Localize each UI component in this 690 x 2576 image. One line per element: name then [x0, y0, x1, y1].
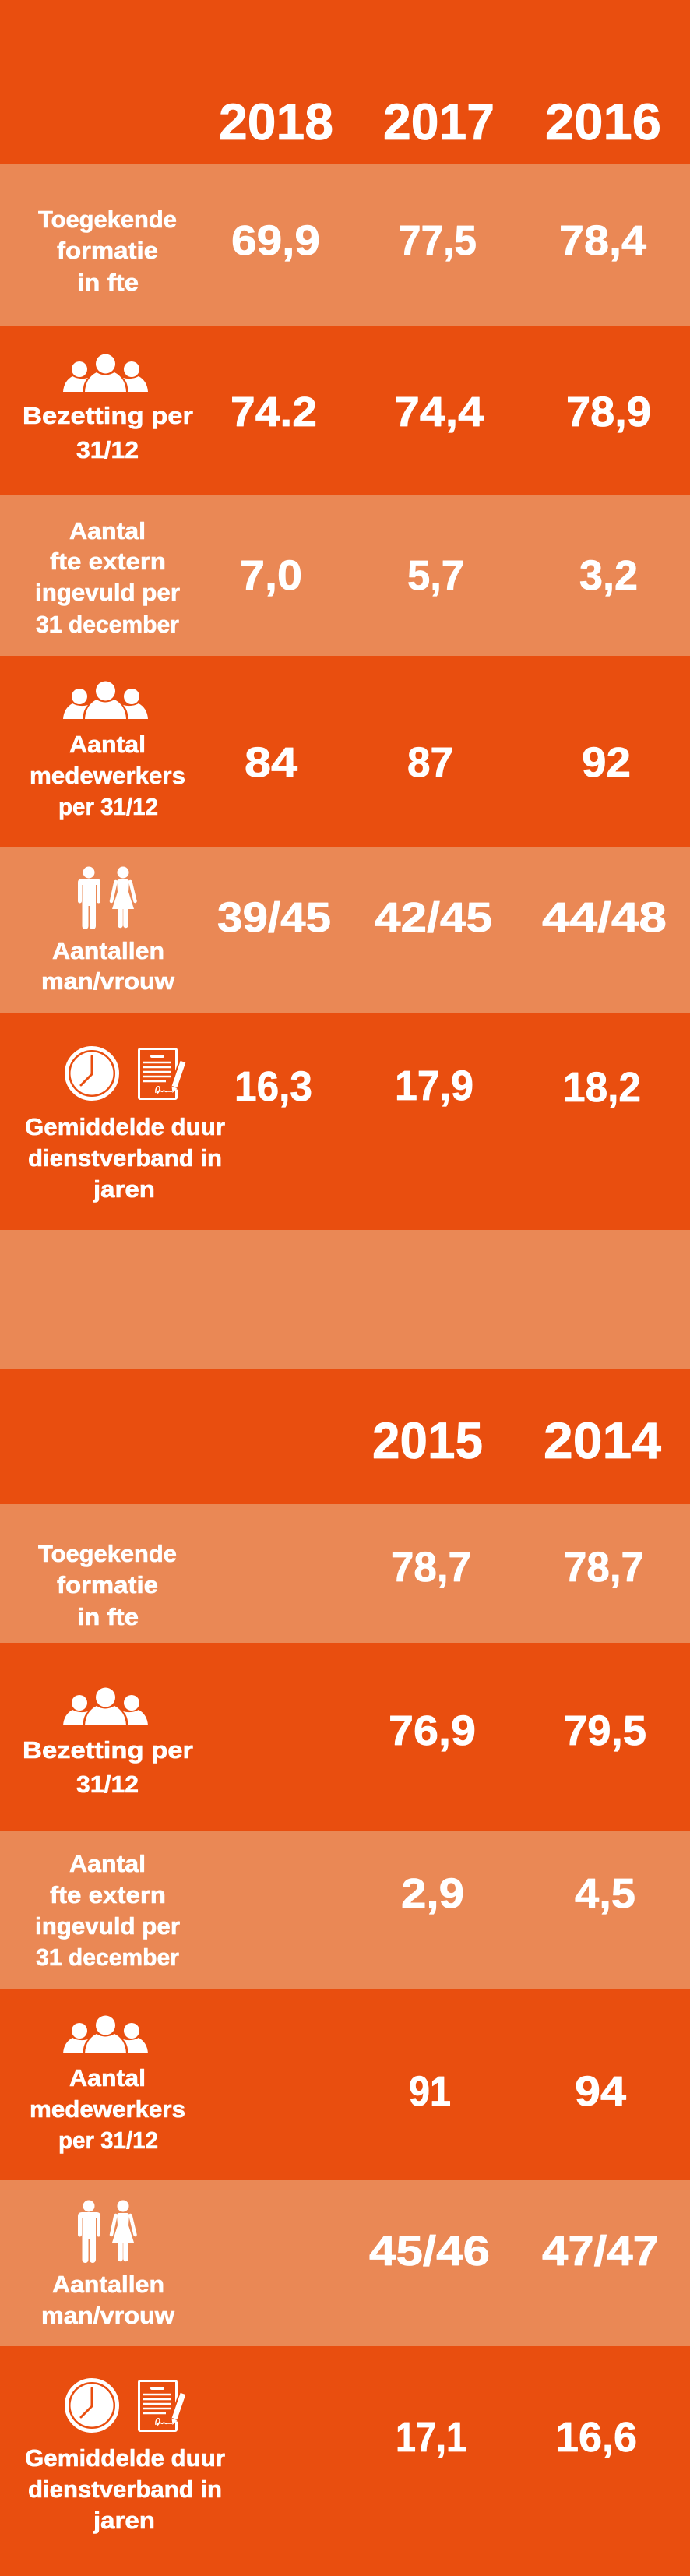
year 2017: 2017 [383, 93, 495, 150]
value 42/45: 42/45 [375, 894, 492, 941]
label: toegekende formatie in fte: formatie [57, 237, 158, 264]
value 94: 94 [575, 2068, 626, 2115]
label: aantal fte extern ingevuld per 31 december: Aantal [69, 1850, 146, 1877]
label: gemiddelde duur dienstverband in jaren [25, 2444, 225, 2534]
icon: clock and contract [67, 2380, 183, 2430]
label: toegekende formatie in fte: in fte [77, 1603, 139, 1630]
value 69,9: 69,9 [231, 217, 320, 264]
panel: aantallen man/vrouw 2015-2014 [0, 2180, 690, 2346]
value 76,9: 76,9 [389, 1707, 476, 1754]
panel: aantallen man/vrouw 2018-2016 [0, 847, 690, 1013]
value 47/47: 47/47 [542, 2228, 659, 2275]
value 16,3: 16,3 [234, 1063, 312, 1110]
label: bezetting per 31/12: Bezetting per [23, 1736, 193, 1764]
value 84: 84 [245, 739, 297, 786]
label: aantal fte extern ingevuld per 31 december: ingevuld per [35, 579, 180, 606]
value 74.2: 74.2 [231, 389, 317, 435]
icon: people [63, 2016, 148, 2053]
label: aantal fte extern ingevuld per 31 december [35, 1850, 180, 1971]
label: aantal fte extern ingevuld per 31 december: ingevuld per [35, 1912, 180, 1940]
label: toegekende formatie in fte [38, 1540, 177, 1630]
icon: people [63, 354, 148, 392]
icon: clock and contract [67, 1048, 183, 1098]
panel: fte extern 2018-2016 [0, 495, 690, 656]
value 18,2: 18,2 [563, 1064, 641, 1111]
label: toegekende formatie in fte: in fte [77, 269, 139, 296]
label: aantal fte extern ingevuld per 31 december: 31 december [36, 1943, 179, 1971]
panel: toegekende formatie 2015-2014 [0, 1504, 690, 1643]
value 74,4: 74,4 [394, 389, 484, 435]
value 45/46: 45/46 [369, 2228, 490, 2275]
value 78,9: 78,9 [566, 389, 651, 435]
value 39/45: 39/45 [217, 894, 331, 941]
value 87: 87 [407, 739, 453, 786]
icon: people [63, 1687, 148, 1725]
label: aantal medewerkers per 31/12: medewerkers [30, 2095, 185, 2123]
label: aantallen man/vrouw [41, 937, 175, 995]
label: aantallen man/vrouw [41, 2271, 175, 2329]
label: gemiddelde duur dienstverband in jaren: Gemiddelde duur [25, 1113, 225, 1140]
panel: bezetting 2015-2014 [0, 1643, 690, 1831]
icon: man and woman [78, 2200, 136, 2263]
label: gemiddelde duur dienstverband in jaren: jaren [93, 1175, 155, 1203]
spacer band [0, 1230, 690, 1369]
panel: toegekende formatie 2018-2016 [0, 164, 690, 326]
year 2016: 2016 [545, 93, 661, 150]
label: aantal medewerkers per 31/12: medewerkers [30, 762, 185, 789]
panel: gemiddelde duur dienstverband 2015-2014 [0, 2346, 690, 2576]
value 77,5: 77,5 [399, 217, 477, 264]
label: aantal fte extern ingevuld per 31 december: 31 december [36, 611, 179, 638]
value 78,7: 78,7 [564, 1544, 644, 1591]
label: aantal medewerkers per 31/12: Aantal [69, 731, 146, 758]
panel: gemiddelde duur dienstverband 2018-2016 [0, 1013, 690, 1230]
year 2015: 2015 [372, 1411, 483, 1469]
value 17,9: 17,9 [395, 1062, 473, 1109]
label: bezetting per 31/12 [23, 402, 193, 463]
label: toegekende formatie in fte: Toegekende [38, 1540, 177, 1567]
label: aantal medewerkers per 31/12 [30, 2064, 185, 2154]
year 2018: 2018 [219, 93, 333, 150]
value 5,7: 5,7 [407, 552, 464, 599]
panel: aantal medewerkers 2018-2016 [0, 656, 690, 847]
label: aantallen man/vrouw: man/vrouw [41, 967, 175, 995]
label: aantal fte extern ingevuld per 31 december: fte extern [50, 1881, 166, 1908]
label: gemiddelde duur dienstverband in jaren: dienstverband in [28, 2476, 222, 2503]
label: aantal fte extern ingevuld per 31 december: Aantal [69, 517, 146, 544]
value 78,7: 78,7 [391, 1544, 471, 1591]
label: aantal fte extern ingevuld per 31 december [35, 517, 180, 638]
year 2014: 2014 [544, 1411, 661, 1469]
label: bezetting per 31/12: 31/12 [76, 436, 139, 463]
icon: people [63, 681, 148, 719]
value 4,5: 4,5 [575, 1870, 635, 1917]
label: toegekende formatie in fte [38, 206, 177, 296]
panel: bezetting 2018-2016 [0, 326, 690, 495]
label: toegekende formatie in fte: Toegekende [38, 206, 177, 233]
label: aantal medewerkers per 31/12: Aantal [69, 2064, 146, 2091]
label: aantallen man/vrouw: man/vrouw [41, 2302, 175, 2329]
value 78,4: 78,4 [559, 217, 646, 264]
value 2,9: 2,9 [401, 1870, 464, 1917]
label: bezetting per 31/12: Bezetting per [23, 402, 193, 429]
label: aantallen man/vrouw: Aantallen [52, 937, 164, 964]
value 92: 92 [582, 739, 631, 786]
value 44/48: 44/48 [542, 894, 667, 941]
panel: aantal medewerkers 2015-2014 [0, 1989, 690, 2180]
label: bezetting per 31/12: 31/12 [76, 1771, 139, 1798]
label: gemiddelde duur dienstverband in jaren [25, 1113, 225, 1203]
label: gemiddelde duur dienstverband in jaren: jaren [93, 2507, 155, 2534]
label: aantal fte extern ingevuld per 31 december: fte extern [50, 548, 166, 575]
panel: header 2015-2014 [0, 1369, 690, 1504]
value 16,6: 16,6 [555, 2414, 637, 2461]
label: aantal medewerkers per 31/12 [30, 731, 185, 820]
panel: fte extern 2015-2014 [0, 1831, 690, 1989]
icon: man and woman [78, 866, 136, 929]
value 3,2: 3,2 [579, 552, 638, 599]
value 91: 91 [409, 2068, 451, 2115]
label: gemiddelde duur dienstverband in jaren: Gemiddelde duur [25, 2444, 225, 2472]
label: aantal medewerkers per 31/12: per 31/12 [58, 793, 158, 820]
panel: header 2018-2016 [0, 0, 690, 164]
label: aantal medewerkers per 31/12: per 31/12 [58, 2127, 158, 2154]
label: gemiddelde duur dienstverband in jaren: dienstverband in [28, 1144, 222, 1172]
label: toegekende formatie in fte: formatie [57, 1571, 158, 1598]
value 79,5: 79,5 [564, 1707, 646, 1754]
label: aantallen man/vrouw: Aantallen [52, 2271, 164, 2298]
value 7,0: 7,0 [240, 552, 302, 599]
value 17,1: 17,1 [396, 2414, 466, 2461]
label: bezetting per 31/12 [23, 1736, 193, 1798]
